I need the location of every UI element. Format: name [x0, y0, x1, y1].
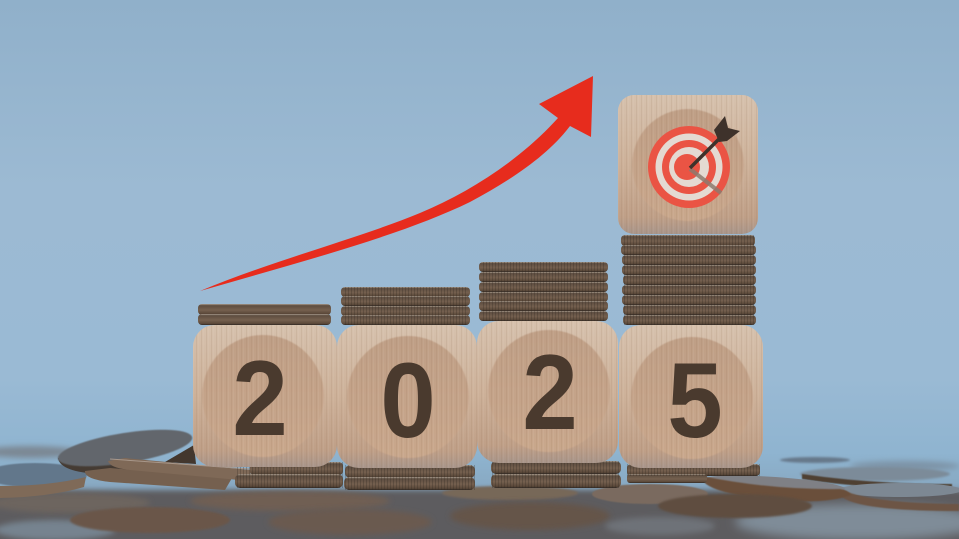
wooden block: digit 0	[337, 325, 477, 468]
coins under digit 0 block	[344, 465, 475, 490]
coin stack 2	[341, 287, 470, 325]
right foreground coins	[592, 467, 959, 518]
coins under digit 5 block	[627, 464, 760, 483]
icon: dart shadow	[690, 169, 721, 193]
wooden block: target icon	[618, 95, 758, 234]
wooden block: digit 5	[619, 325, 763, 468]
coin stack 4	[621, 235, 756, 325]
coin stack 1	[198, 304, 331, 325]
icon: dart arrow	[690, 116, 740, 168]
wooden block: second digit 2	[477, 321, 618, 463]
coin stack 3	[479, 262, 608, 321]
icon: target bullseye	[648, 126, 730, 208]
digit 2 second: 2	[522, 332, 578, 452]
wooden block: digit 2	[193, 325, 337, 467]
coins under second digit 2 block	[491, 461, 621, 488]
left background coins	[0, 423, 251, 498]
digit 0: 0	[380, 340, 436, 460]
coins under digit 2 block	[235, 462, 343, 488]
digit 2: 2	[232, 338, 288, 458]
foreground blurred coin floor	[0, 457, 959, 539]
digit 5: 5	[667, 340, 723, 460]
red growth arrow	[200, 76, 593, 291]
